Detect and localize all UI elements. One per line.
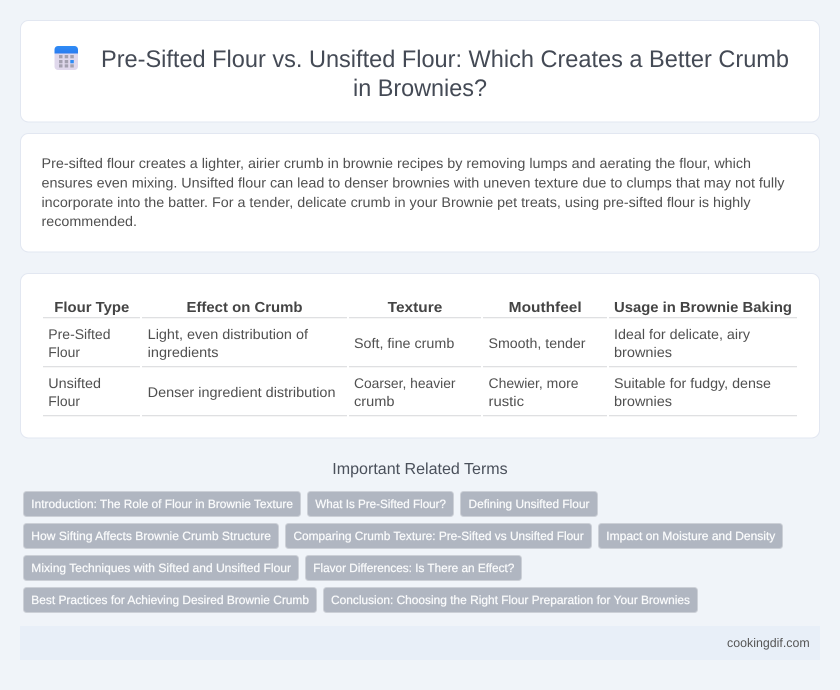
table row: pre-sifted flour: Pre-Sifted <box>48 326 110 342</box>
text block: summary: ensures even mixing. Unsifted flour can lead to denser brownies with uneven texture due to clumps that may not fully <box>42 174 785 190</box>
text block: summary: recommended. <box>42 213 137 229</box>
tag: Impact on Moisture and Density <box>606 529 775 543</box>
table row: unsifted flour: Denser ingredient distribution <box>148 384 336 400</box>
tag: Mixing Techniques with Sifted and Unsifted Flour <box>31 561 291 575</box>
table row: pre-sifted flour: Smooth, tender <box>488 335 586 351</box>
footer <box>20 626 820 660</box>
tag: Defining Unsifted Flour <box>468 497 590 511</box>
panel: comparison table <box>20 274 820 438</box>
table row: pre-sifted flour: Ideal for delicate, airy <box>614 326 750 342</box>
table row: pre-sifted flour: brownies <box>614 344 672 360</box>
panel: related term tags <box>24 492 782 612</box>
table row: pre-sifted flour <box>48 326 750 360</box>
table row: unsifted flour: crumb <box>354 393 395 409</box>
tag <box>286 524 592 548</box>
table header row: Effect on Crumb <box>186 300 303 316</box>
title <box>101 46 789 102</box>
table header row: Flour Type <box>54 300 129 316</box>
tag <box>24 588 316 612</box>
tag <box>24 492 300 516</box>
table row: unsifted flour: Flour <box>48 393 80 409</box>
table row: unsifted flour: Chewier, more <box>488 375 579 391</box>
table header row: Texture <box>388 300 442 316</box>
tag: Introduction: The Role of Flour in Brownie Texture <box>31 497 293 511</box>
tag <box>308 492 454 516</box>
table row: unsifted flour: brownies <box>614 393 672 409</box>
text block: summary <box>42 155 785 229</box>
tag: How Sifting Affects Brownie Crumb Structure <box>31 529 271 543</box>
panel: summary paragraph <box>20 134 820 252</box>
table row: pre-sifted flour: Soft, fine crumb <box>354 335 455 351</box>
tag <box>324 588 698 612</box>
table row: unsifted flour: Unsifted <box>48 375 101 391</box>
title: in Brownies? <box>353 75 487 102</box>
tag: What Is Pre-Sifted Flour? <box>315 497 446 511</box>
table row: pre-sifted flour: Flour <box>48 344 80 360</box>
text block: summary: Pre-sifted flour creates a lighter, airier crumb in brownie recipes by removing lumps and aerating the flour, which <box>42 155 751 171</box>
table header row: Usage in Brownie Baking <box>614 300 792 316</box>
icon: calendar <box>54 46 78 70</box>
table row: unsifted flour: Suitable for fudgy, dense <box>614 375 771 391</box>
table row: unsifted flour: rustic <box>488 393 524 409</box>
tag <box>24 524 278 548</box>
tag: Comparing Crumb Texture: Pre-Sifted vs Unsifted Flour <box>294 529 584 543</box>
tag: Conclusion: Choosing the Right Flour Preparation for Your Brownies <box>331 593 690 607</box>
tag <box>460 492 598 516</box>
table header row <box>54 300 792 316</box>
table row: pre-sifted flour: ingredients <box>148 344 218 360</box>
heading: related terms: Important Related Terms <box>332 461 508 478</box>
table header row: Mouthfeel <box>509 300 582 316</box>
tag: Best Practices for Achieving Desired Brownie Crumb <box>31 593 309 607</box>
text block: summary: incorporate into the batter. For a tender, delicate crumb in your Brownie pet treats, using pre-sifted flour is highly <box>42 194 750 210</box>
panel: header <box>20 20 820 122</box>
tag <box>24 556 298 580</box>
footer: cookingdif.com <box>727 636 810 650</box>
tag <box>598 524 782 548</box>
title: Pre-Sifted Flour vs. Unsifted Flour: Which Creates a Better Crumb <box>101 46 789 73</box>
tag <box>306 556 522 580</box>
table row: unsifted flour: Coarser, heavier <box>354 375 456 391</box>
table row: pre-sifted flour: Light, even distribution of <box>148 326 308 342</box>
tag: Flavor Differences: Is There an Effect? <box>313 561 515 575</box>
table row: unsifted flour <box>48 375 771 409</box>
